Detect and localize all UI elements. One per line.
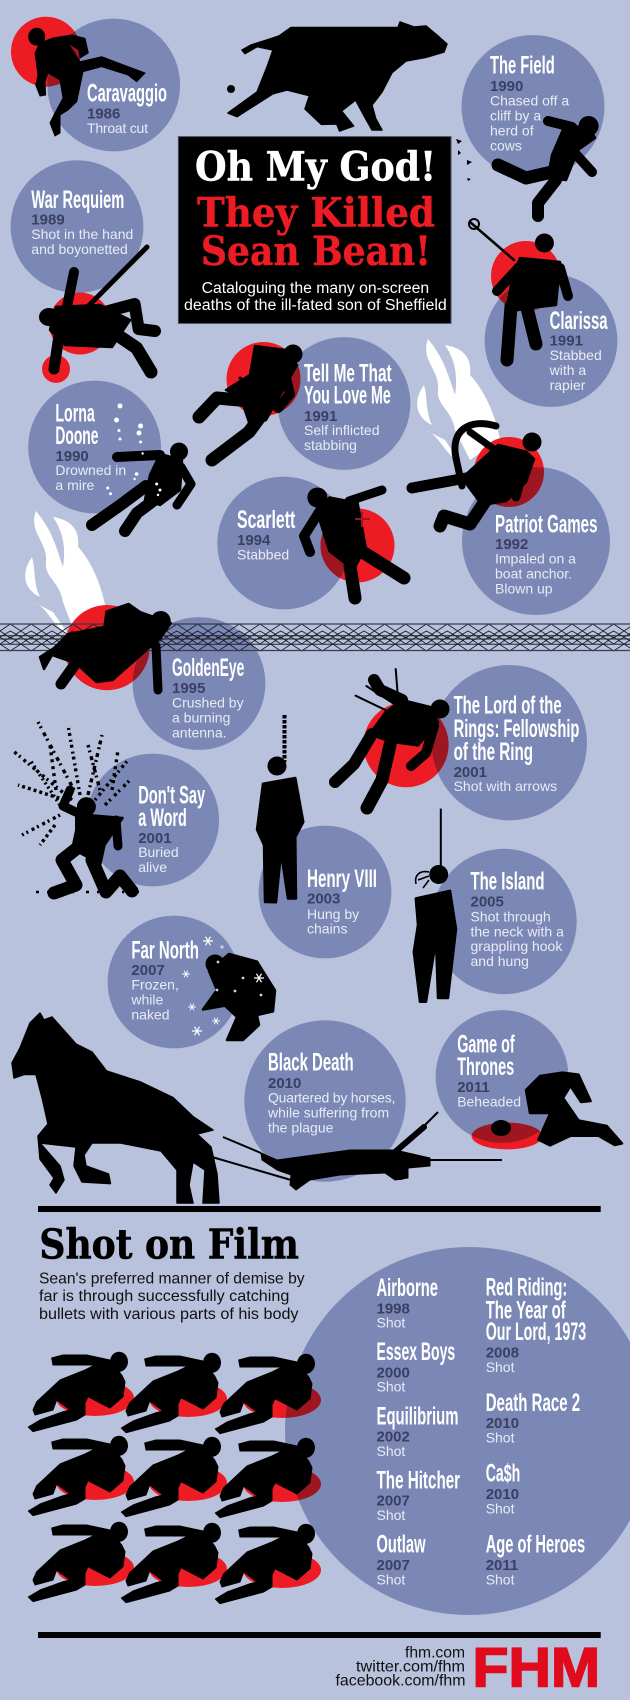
description: Blown up <box>495 580 553 596</box>
icon: frozen man <box>203 954 275 1040</box>
panel: War Requiem <box>11 160 155 383</box>
year: 2003 <box>307 890 340 908</box>
title: The Island: The Island <box>470 867 544 895</box>
description: Shot with arrows <box>454 778 557 794</box>
title: Don't Say a Word: a Word <box>138 804 187 832</box>
description: Impaled on a <box>495 551 576 567</box>
icon: grid of shot men <box>28 1352 315 1604</box>
description: antenna. <box>172 724 226 740</box>
icon: running man <box>456 116 599 216</box>
description: the neck with a <box>470 923 564 939</box>
description: and boyonetted <box>31 241 128 257</box>
text: intro <box>39 1270 305 1323</box>
film: Outlaw: Shot <box>376 1571 405 1587</box>
year: 1990 <box>55 448 89 465</box>
description: Beheaded <box>457 1093 521 1109</box>
panel: Henry VIII <box>257 715 391 958</box>
description: the plague <box>268 1119 334 1135</box>
film: Red Riding: Red Riding: <box>486 1274 567 1302</box>
description: Self inflicted <box>304 422 379 438</box>
description: Shot through <box>470 908 551 924</box>
description: naked <box>131 1006 170 1022</box>
panel: Tell Me That You Love Me <box>199 337 410 470</box>
film: Death Race 2: Shot <box>486 1430 515 1446</box>
panel: title box: deaths of the ill-fated son of Sheffield <box>184 297 447 314</box>
year: 2011 <box>457 1079 490 1096</box>
film: Age of Heroes: 2011 <box>486 1557 518 1574</box>
description: Throat cut <box>87 120 148 136</box>
year: 2005 <box>470 894 504 910</box>
film: Death Race 2: 2010 <box>486 1415 519 1432</box>
description: Buried <box>138 844 179 860</box>
title: Lorna Doone: Lorna <box>55 400 95 428</box>
film: Outlaw <box>376 1531 426 1587</box>
panel: Caravaggio <box>11 17 180 151</box>
description: while suffering from <box>267 1104 389 1120</box>
footer links: facebook.com/fhm <box>336 1673 466 1690</box>
icon: stabbed man <box>304 488 404 598</box>
year: 2010 <box>268 1075 301 1092</box>
icon: self stabbing man <box>199 344 302 460</box>
description: boat anchor. <box>495 566 572 582</box>
title: Black Death: Black Death <box>268 1049 354 1077</box>
title: Oh My God!: Oh My God! <box>195 144 436 191</box>
description: cliff by a <box>490 108 541 124</box>
panel: GoldenEye <box>25 511 265 750</box>
film: Equilibrium: Equilibrium <box>376 1402 458 1430</box>
title: Caravaggio: Caravaggio <box>87 79 167 107</box>
title: Henry VIII: Henry VIII <box>307 865 377 893</box>
description: Chased off a <box>490 93 569 109</box>
panel: Lorna Doone <box>28 381 191 531</box>
description: while <box>130 992 164 1008</box>
film: Airborne: Airborne <box>376 1274 438 1302</box>
film: Essex Boys: Essex Boys <box>376 1338 455 1366</box>
year: 1992 <box>495 536 528 553</box>
film: Airborne <box>376 1274 438 1331</box>
text: intro: bullets with various parts of his body <box>39 1306 298 1323</box>
film: Airborne: Shot <box>376 1315 405 1331</box>
description: Crushed by <box>172 694 244 710</box>
title: They Killed: They Killed <box>197 190 435 237</box>
footer links: twitter.com/fhm <box>356 1659 465 1676</box>
film: Essex Boys: Shot <box>376 1379 405 1395</box>
text: intro: far is through successfully catching <box>39 1288 289 1305</box>
icon: man with cut throat <box>28 28 145 136</box>
description: chains <box>307 920 347 936</box>
panel: Patriot Games <box>412 339 610 615</box>
logo: FHM: FHM <box>472 1636 600 1699</box>
icon: man shot with arrows <box>335 669 450 808</box>
panel: Shot on Film list <box>28 1247 630 1615</box>
icon: snowflakes <box>182 937 264 1035</box>
description: Stabbed <box>550 347 602 363</box>
film: Outlaw: Outlaw <box>376 1531 426 1559</box>
year: 2001 <box>138 830 172 847</box>
icon: flames <box>417 339 500 462</box>
description: Quartered by horses, <box>268 1090 395 1106</box>
description: Drowned in <box>55 462 126 478</box>
divider <box>38 1632 601 1638</box>
film: Essex Boys: 2000 <box>376 1364 410 1381</box>
year: 2007 <box>131 962 165 979</box>
icon: man stabbed by rapier <box>469 219 568 360</box>
title: GoldenEye: GoldenEye <box>172 654 244 682</box>
title: Lorna Doone: Doone <box>55 422 98 450</box>
description: grappling hook <box>470 938 563 954</box>
subtitle: Cataloguing the many on-screen <box>202 280 429 297</box>
description: Hung by <box>307 906 359 922</box>
description: stabbing <box>304 437 357 453</box>
panel: Far North <box>108 916 275 1048</box>
panel: The Island <box>414 809 577 1002</box>
panel: Lord of the Rings <box>335 665 587 820</box>
film: Equilibrium: 2002 <box>376 1429 410 1446</box>
icon: buried man <box>54 790 132 893</box>
film: Red Riding: 2008 <box>486 1344 519 1361</box>
year: 1991 <box>304 408 337 425</box>
year: 1991 <box>550 333 583 350</box>
divider <box>38 1206 601 1212</box>
film: Ca$h <box>486 1460 520 1516</box>
text: intro: Sean's preferred manner of demise by <box>39 1270 305 1287</box>
footer links: fhm.com <box>405 1644 465 1661</box>
title: Far North: Far North <box>131 937 199 965</box>
year: 1986 <box>87 106 120 123</box>
film: Outlaw: 2007 <box>376 1557 410 1574</box>
film: Death Race 2 <box>486 1389 580 1446</box>
icon: man crushed by antenna <box>40 604 171 690</box>
film: Age of Heroes: Shot <box>486 1571 515 1587</box>
icon: hanged man with hook <box>414 809 456 1002</box>
description: a burning <box>172 709 230 725</box>
panel: Clarissa <box>469 219 617 407</box>
description: with a <box>549 362 586 378</box>
panel: Don't Say a Word <box>12 722 219 893</box>
icon: beheaded man <box>491 1073 622 1145</box>
description: Shot in the hand <box>31 226 133 242</box>
year: 1989 <box>31 212 65 229</box>
title: War Requiem: War Requiem <box>31 186 124 214</box>
year: 1995 <box>172 680 205 697</box>
title: Game of Thrones: Game of <box>457 1031 515 1059</box>
title: The Field: The Field <box>490 52 555 80</box>
icon: horse <box>12 1013 219 1203</box>
description: a mire <box>55 477 95 493</box>
panel: Scarlett <box>217 477 404 609</box>
film: Equilibrium <box>376 1402 458 1459</box>
panel: title box <box>178 137 451 323</box>
film: The Hitcher: The Hitcher <box>376 1466 460 1494</box>
film: Essex Boys <box>376 1338 455 1395</box>
title: The Lord of the Rings: of the Ring <box>454 738 533 766</box>
description: rapier <box>550 377 586 393</box>
icon: quartered man and ropes <box>212 1112 502 1190</box>
film: Airborne: 1998 <box>376 1300 410 1317</box>
icon: bubbles <box>106 404 162 496</box>
heading: Shot on Film: Shot on Film <box>39 1220 299 1268</box>
film: The Hitcher <box>376 1466 460 1523</box>
film: Age of Heroes <box>486 1531 585 1587</box>
description: alive <box>138 859 167 875</box>
title: Game of Thrones: Thrones <box>457 1053 514 1081</box>
icon: man impaled on anchor <box>412 424 542 526</box>
film: Red Riding: Shot <box>486 1359 515 1375</box>
year: 1994 <box>237 532 271 549</box>
film: The Hitcher: 2007 <box>376 1493 410 1510</box>
footer links <box>336 1644 466 1690</box>
description: Stabbed <box>237 546 289 562</box>
red circles <box>56 1380 321 1588</box>
panel: Game of Thrones <box>436 1010 622 1149</box>
description: cows <box>490 138 522 154</box>
icon: cow <box>227 22 447 131</box>
title: Tell Me That You Love Me: Tell Me That <box>304 360 392 388</box>
icon: man hung by chain <box>257 715 303 902</box>
icon: burning flames <box>25 511 108 642</box>
film: Red Riding <box>486 1274 586 1375</box>
title: Don't Say a Word: Don't Say <box>138 782 205 810</box>
year: 2001 <box>454 764 487 781</box>
year: 1990 <box>490 78 523 95</box>
fence: antenna <box>0 623 630 652</box>
film: Ca$h: Shot <box>486 1500 515 1516</box>
title: Sean Bean!: Sean Bean! <box>201 228 431 275</box>
title: Tell Me That You Love Me: You Love Me <box>304 382 391 410</box>
title: Scarlett: Scarlett <box>237 506 296 534</box>
film: The Hitcher: Shot <box>376 1507 405 1523</box>
icon: drowning man <box>92 443 191 531</box>
film: Ca$h: 2010 <box>486 1486 519 1503</box>
description: and hung <box>470 953 529 969</box>
icon: dirt scatter <box>12 722 145 892</box>
description: herd of <box>490 122 534 138</box>
film: Equilibrium: Shot <box>376 1443 405 1459</box>
description: Frozen, <box>131 977 179 993</box>
icon: bayonetted man <box>39 247 155 372</box>
panel: Black Death <box>212 1020 502 1190</box>
panel: The Field <box>456 35 604 216</box>
film: Ca$h: Ca$h <box>486 1460 520 1488</box>
film: Red Riding: The Year of <box>486 1296 566 1324</box>
